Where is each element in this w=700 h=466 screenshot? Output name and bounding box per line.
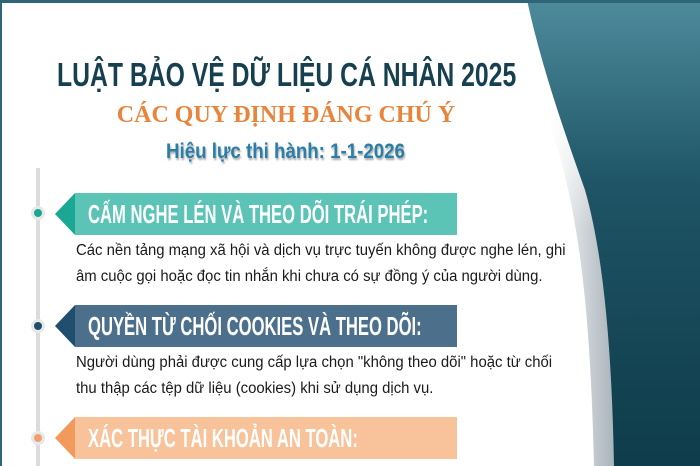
band 3: XÁC THỰC TÀI KHOẢN AN TOÀN:	[88, 423, 358, 453]
text 2: thu thập các tệp dữ liệu (cookies) khi sử dụng dịch vụ.	[76, 380, 433, 397]
title: LUẬT BẢO VỆ DỮ LIỆU CÁ NHÂN 2025	[57, 56, 516, 93]
text 2: Người dùng phải được cung cấp lựa chọn "không theo dõi" hoặc từ chối	[76, 354, 552, 371]
dot 3	[31, 431, 45, 445]
dot 2	[31, 319, 45, 333]
band 3	[55, 417, 457, 459]
effective date: Hiệu lực thi hành: 1-1-2026	[166, 140, 405, 163]
dot 1	[31, 206, 45, 220]
text 1	[76, 242, 566, 285]
band 2: QUYỀN TỪ CHỐI COOKIES VÀ THEO DÕI:	[88, 311, 422, 341]
subtitle: CÁC QUY ĐỊNH ĐÁNG CHÚ Ý	[117, 102, 455, 128]
text 2	[76, 354, 552, 397]
timeline item 1	[31, 193, 566, 285]
band 2	[55, 305, 457, 347]
timeline item 2	[31, 305, 552, 397]
band 1	[55, 193, 457, 235]
text 1: âm cuộc gọi hoặc đọc tin nhắn khi chưa có sự đồng ý của người dùng.	[76, 268, 542, 285]
band 1: CẤM NGHE LÉN VÀ THEO DÕI TRÁI PHÉP:	[88, 199, 428, 229]
text 1: Các nền tảng mạng xã hội và dịch vụ trực tuyến không được nghe lén, ghi	[76, 242, 566, 259]
timeline item 3	[31, 417, 457, 459]
